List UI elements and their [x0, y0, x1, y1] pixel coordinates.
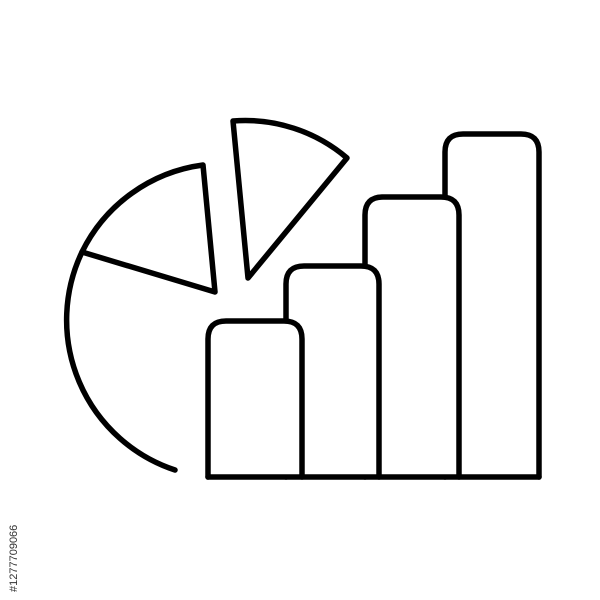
bar 3 [365, 197, 459, 477]
pie: slice 2 [233, 121, 347, 278]
stock id text: #1277709066 [8, 525, 20, 592]
bar 2 [286, 266, 379, 477]
pie: slice 1 [82, 165, 215, 292]
baseline [208, 474, 539, 480]
bar 4 [445, 134, 539, 477]
pie: main arc [67, 252, 175, 470]
bar 1 [208, 321, 302, 477]
